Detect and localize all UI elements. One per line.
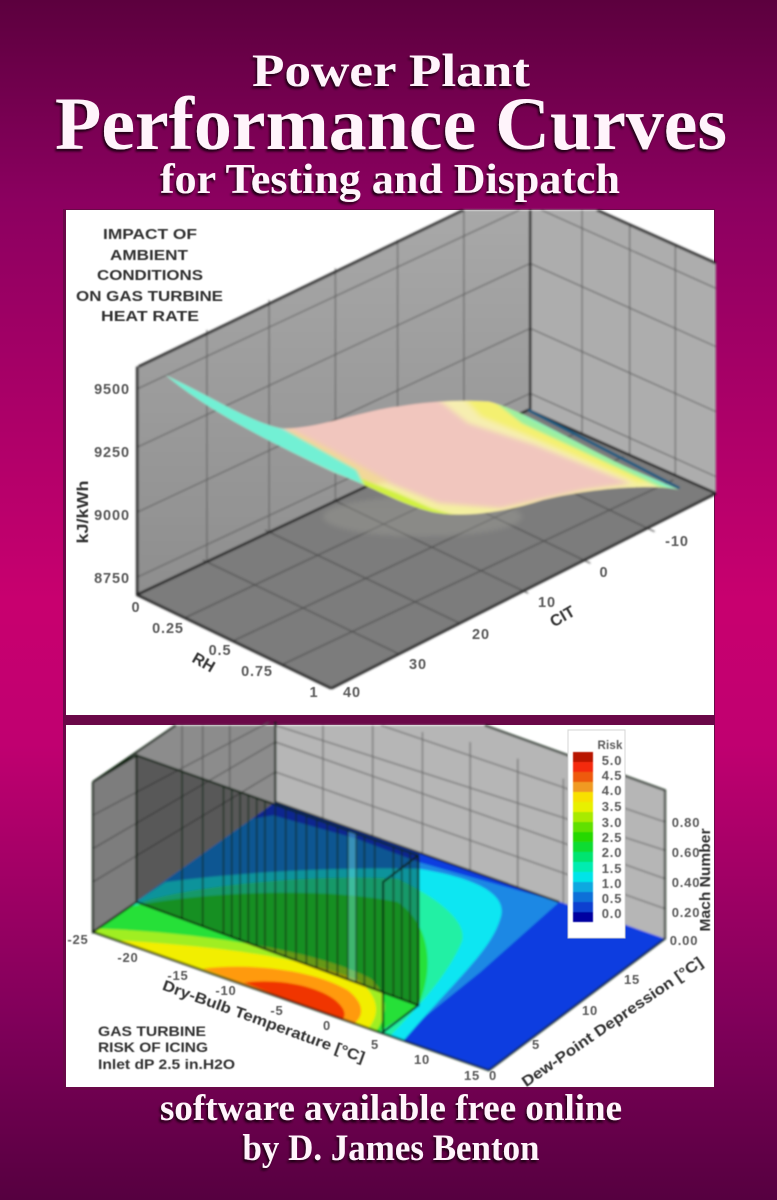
RH ticks: 0.75 [241, 664, 273, 680]
dry-bulb ticks: 10 [414, 1052, 430, 1067]
Mach ticks [670, 815, 700, 948]
walls [93, 725, 665, 939]
title line: Performance Curves: Performance Curves [55, 83, 727, 166]
dry-bulb ticks: 15 [464, 1068, 480, 1083]
legend labels: 3.0 [602, 815, 622, 830]
3D surface plot [136, 205, 716, 688]
axis label CIT: CIT [547, 603, 578, 631]
dry-bulb ticks: -15 [167, 968, 189, 983]
axis label dew-point depression: Dew-Point Depression [°C] [519, 954, 706, 1091]
frame edges [136, 210, 716, 688]
RH ticks: 0.5 [209, 643, 231, 659]
legend labels: 1.5 [602, 861, 622, 876]
RH ticks: 1 [310, 685, 318, 701]
contour floor [94, 802, 666, 1072]
translucent measurement box [93, 722, 665, 1070]
dry-bulb ticks [67, 932, 480, 1083]
legend labels: 4.0 [602, 783, 622, 798]
Mach ticks: 0.60 [672, 845, 700, 860]
legend labels: 0.0 [602, 906, 622, 921]
dew-point ticks: 0 [489, 1068, 497, 1083]
heat rate ticks: 8750 [94, 571, 130, 587]
legend labels: 1.0 [602, 876, 622, 891]
CIT ticks [343, 534, 689, 701]
left wall [136, 210, 530, 595]
panel shadow and background [63, 717, 715, 1090]
right wall [530, 210, 716, 493]
dew-point ticks [489, 972, 640, 1083]
chart title text: AMBIENT [110, 248, 188, 264]
RH ticks [132, 600, 318, 701]
CIT ticks: 20 [472, 627, 490, 643]
title line: for Testing and Dispatch: for Testing and Dispatch [160, 157, 620, 203]
Mach ticks: 0.40 [672, 875, 700, 890]
CIT ticks: 40 [343, 685, 361, 701]
title line: Power Plant: Power Plant [252, 45, 530, 97]
legend labels: 4.5 [602, 768, 622, 783]
dry-bulb ticks: 5 [371, 1037, 379, 1052]
axis label Mach Number: Mach Number [697, 828, 714, 931]
surface shadow [323, 497, 522, 537]
CIT ticks: 30 [409, 657, 427, 673]
chart caption [98, 1023, 235, 1072]
heat rate ticks: 9000 [94, 508, 130, 524]
footer text [160, 1088, 622, 1169]
dry-bulb ticks: -25 [67, 932, 89, 947]
dew-point ticks: 5 [532, 1037, 540, 1052]
legend [568, 730, 625, 938]
3D contour plot [90, 721, 668, 1073]
legend labels: 2.5 [602, 830, 622, 845]
dark blue edge under surface [528, 410, 679, 488]
dry-bulb ticks: 0 [323, 1018, 331, 1033]
chart caption: RISK OF ICING [98, 1039, 208, 1055]
axis label RH: RH [189, 650, 218, 676]
axis labels [67, 815, 714, 1091]
legend labels: 5.0 [602, 753, 622, 768]
CIT ticks: 10 [538, 595, 556, 611]
legend labels [597, 740, 623, 921]
wall grid [93, 719, 665, 909]
legend labels: 0.5 [602, 891, 622, 906]
legend labels: Risk [597, 740, 623, 752]
axis label kJ/kWh: kJ/kWh [75, 480, 92, 544]
dew-point ticks: 15 [624, 972, 640, 987]
axis labels [75, 382, 689, 701]
dew-point ticks: 10 [582, 1003, 598, 1018]
chart title text: IMPACT OF [103, 227, 197, 243]
RH ticks: 0.25 [152, 621, 184, 637]
heat rate ticks [94, 382, 130, 587]
panel: icing risk chart [63, 717, 715, 1091]
heat rate ticks: 9250 [94, 445, 130, 461]
Mach ticks: 0.80 [672, 815, 700, 830]
RH ticks: 0 [132, 600, 140, 616]
legend box [568, 730, 625, 938]
CIT ticks: 0 [600, 565, 608, 581]
chart title text: CONDITIONS [97, 268, 203, 284]
chart title text: HEAT RATE [101, 309, 199, 325]
title block [55, 45, 727, 203]
axis label dry-bulb temperature: Dry-Bulb Temperature [°C] [160, 977, 367, 1066]
panel shadow and background [63, 209, 715, 718]
legend colour bar [573, 752, 593, 922]
floor [136, 410, 716, 688]
legend labels: 2.0 [602, 845, 622, 860]
heat rate ticks: 9500 [94, 382, 130, 398]
dry-bulb ticks: -5 [270, 1003, 284, 1018]
footer line: software available free online: software available free online [160, 1088, 622, 1129]
Mach ticks: 0.00 [670, 933, 698, 948]
chart caption: Inlet dP 2.5 in.H2O [98, 1057, 235, 1072]
grid lines [139, 205, 716, 665]
CIT ticks: -10 [665, 534, 689, 550]
chart title text: ON GAS TURBINE [76, 289, 223, 305]
legend labels: 3.5 [602, 799, 622, 814]
surface ribbon [166, 374, 679, 516]
panel: heat rate chart [63, 205, 716, 718]
dry-bulb ticks: -20 [117, 950, 139, 965]
chart title text [76, 227, 223, 325]
chart caption: GAS TURBINE [98, 1023, 206, 1039]
dry-bulb ticks: -10 [215, 983, 237, 998]
Mach ticks: 0.20 [672, 905, 700, 920]
footer line: author: by D. James Benton [242, 1128, 540, 1169]
